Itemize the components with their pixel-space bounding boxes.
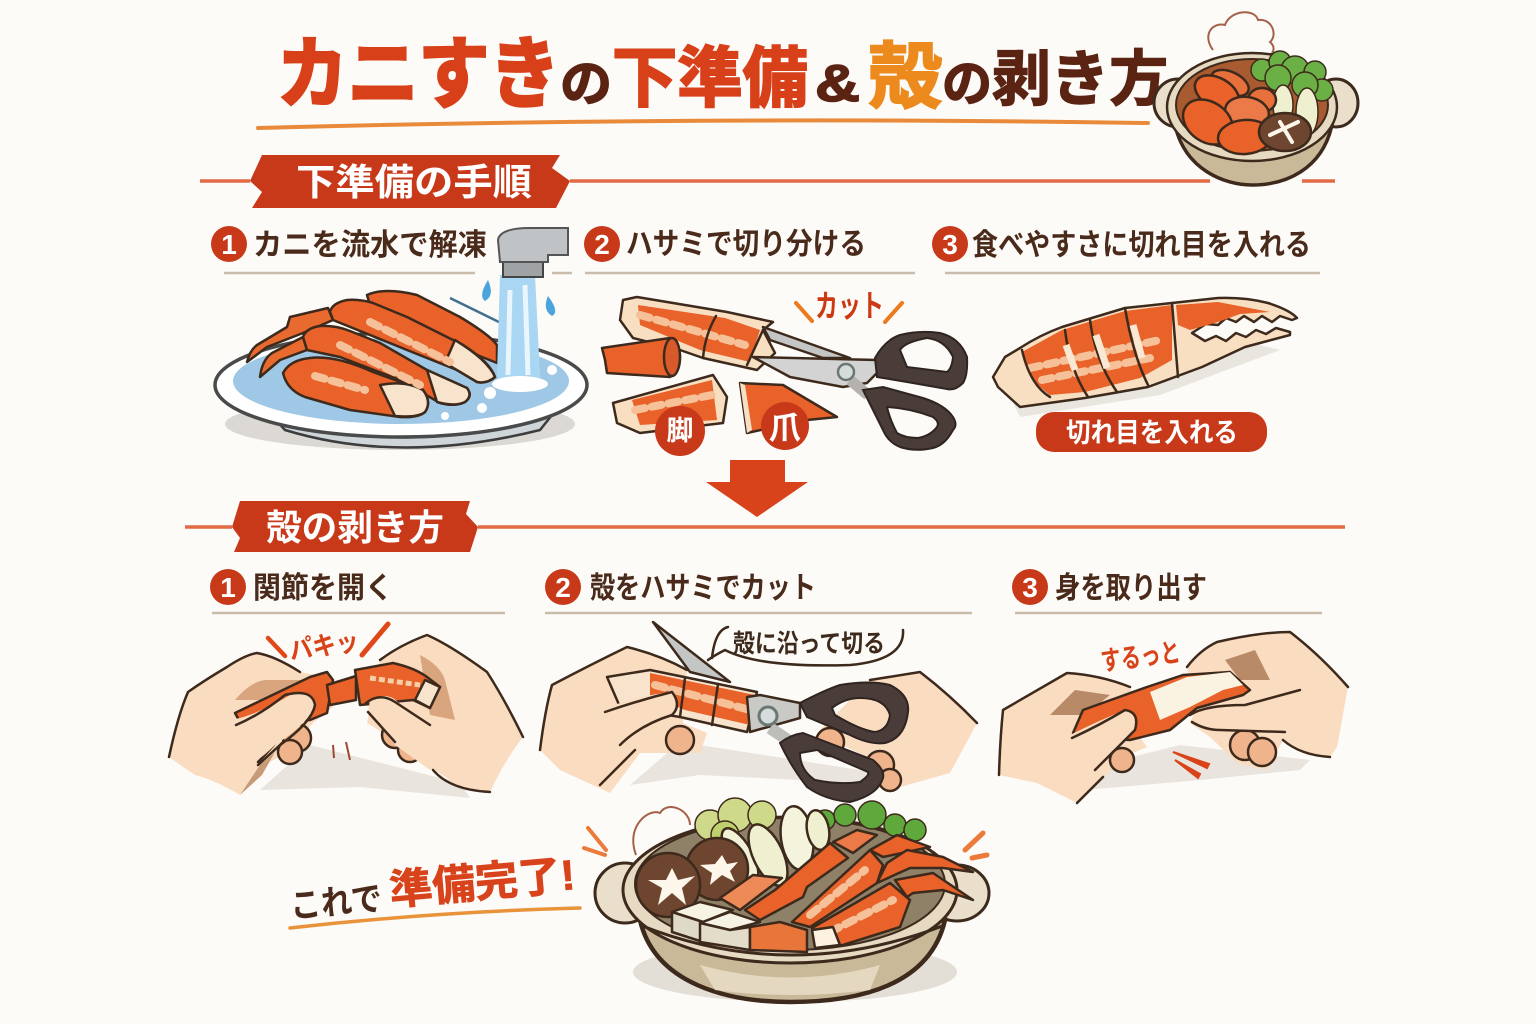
- shell step 2 heading: [545, 569, 972, 613]
- illustration: crab legs on plate under tap: [215, 228, 587, 450]
- step 1 heading: カニを流水で解凍: [253, 229, 487, 262]
- callout: preparation complete: 準備完了!: [388, 851, 577, 914]
- shell step 3 heading: 3: [1022, 572, 1038, 603]
- title: 下準備: [612, 41, 808, 115]
- section heading: shell: 殻の剥き方: [266, 507, 444, 548]
- title underline: [258, 120, 1148, 128]
- illustration: cutting crab legs with scissors: [602, 289, 967, 456]
- title: カニすき: [277, 30, 560, 118]
- greens: [695, 798, 926, 849]
- section heading: preparation: 下準備の手順: [296, 162, 532, 203]
- illustration: cutting shell with scissors: 殻に沿って切る: [733, 630, 885, 658]
- scissor handles: [800, 682, 908, 743]
- illustration: cutting crab legs with scissors: 脚: [666, 416, 694, 446]
- step 3 heading: 食べやすさに切れ目を入れる: [972, 229, 1311, 262]
- illustration: pulling out meat: [999, 632, 1348, 803]
- icon: small hot pot: [1154, 12, 1358, 185]
- title: 剥き方: [992, 46, 1168, 113]
- title: &: [815, 55, 860, 113]
- illustration: claw with cuts: [993, 298, 1297, 417]
- scissor handles: [875, 332, 967, 389]
- shell step 3 heading: 身を取り出す: [1055, 572, 1207, 605]
- callout: preparation complete: [289, 851, 580, 928]
- illustration: finished crab sukiyaki pot: [584, 798, 989, 1002]
- step 1 heading: [211, 226, 572, 273]
- label pill: cuts: 切れ目を入れる: [1066, 418, 1238, 448]
- step 3 heading: [932, 226, 1320, 273]
- shell step 2 heading: 2: [555, 572, 571, 603]
- section heading: shell: [185, 501, 1345, 552]
- step 2 heading: [584, 226, 915, 273]
- greens: [1251, 51, 1333, 101]
- shell step 3 heading: [1012, 569, 1322, 613]
- step 1 heading: 1: [221, 229, 237, 260]
- arrow: down: [706, 460, 808, 517]
- section heading: preparation: [200, 155, 1335, 208]
- title: 殻: [868, 38, 942, 118]
- illustration: cutting shell with scissors: [540, 622, 977, 802]
- illustration: cutting crab legs with scissors: 爪: [769, 410, 801, 446]
- title: [277, 30, 1168, 118]
- step 3 heading: 3: [942, 229, 958, 260]
- shell step 1 heading: [210, 569, 505, 613]
- shell step 1 heading: 関節を開く: [253, 572, 393, 605]
- shell step 1 heading: 1: [220, 572, 236, 603]
- step 2 heading: ハサミで切り分ける: [626, 228, 866, 261]
- label pill: cuts: [1036, 412, 1267, 452]
- illustration: hands breaking joint: パキッ: [287, 626, 361, 666]
- illustration: cutting crab legs with scissors: カット: [815, 289, 884, 324]
- title: の: [560, 56, 612, 112]
- callout: preparation complete: これで: [289, 880, 384, 926]
- title: の: [942, 56, 992, 112]
- shell step 2 heading: 殻をハサミでカット: [590, 572, 816, 605]
- illustration: pulling out meat: するっと: [1099, 637, 1182, 677]
- step 2 heading: 2: [594, 229, 610, 260]
- illustration: hands breaking joint: [169, 624, 523, 798]
